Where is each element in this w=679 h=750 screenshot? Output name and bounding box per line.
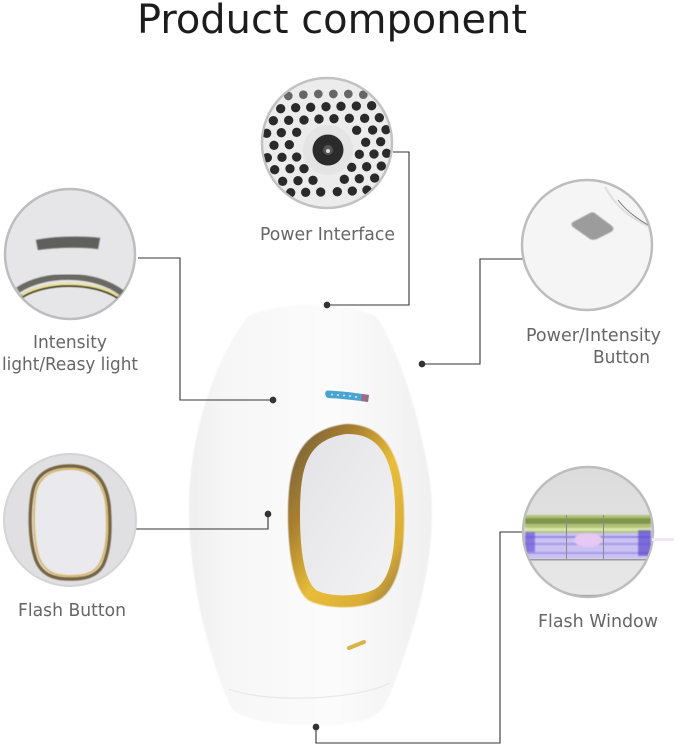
flash button with gold ring (288, 424, 404, 607)
connector: intensity light (138, 258, 276, 403)
icon: power socket (312, 134, 350, 166)
device body (189, 305, 432, 725)
icon: gold ring (30, 466, 110, 579)
connector: power interface (324, 152, 409, 308)
panel: flash window (523, 467, 674, 600)
connector: flash button (135, 511, 271, 529)
connector: power button (419, 259, 523, 367)
label: power intensity button: Button (593, 347, 650, 368)
connector: flash window (313, 532, 524, 743)
label: power intensity button: Power/Intensity (526, 325, 661, 346)
panel: flash button (4, 454, 136, 586)
label: intensity light: light/Reasy light (2, 354, 138, 375)
gold slot (349, 642, 364, 648)
icon: perforated grille (262, 90, 391, 197)
label: intensity light (2, 332, 138, 375)
label: flash window: Flash Window (538, 611, 658, 632)
indicator light (325, 390, 369, 402)
panel: power intensity button (522, 180, 652, 310)
icon: gold arc (18, 277, 122, 297)
label: power interface: Power Interface (260, 224, 395, 245)
panel: power interface (262, 78, 392, 208)
lower seam (229, 683, 390, 698)
label: power intensity button (526, 325, 661, 368)
icon: light window (525, 515, 651, 600)
label: intensity light: Intensity (33, 332, 107, 353)
icon: button (572, 212, 613, 240)
light glow (652, 538, 674, 541)
panel: intensity light (5, 189, 135, 319)
label: flash button: Flash Button (18, 600, 126, 621)
icon: indicator window (36, 237, 100, 250)
